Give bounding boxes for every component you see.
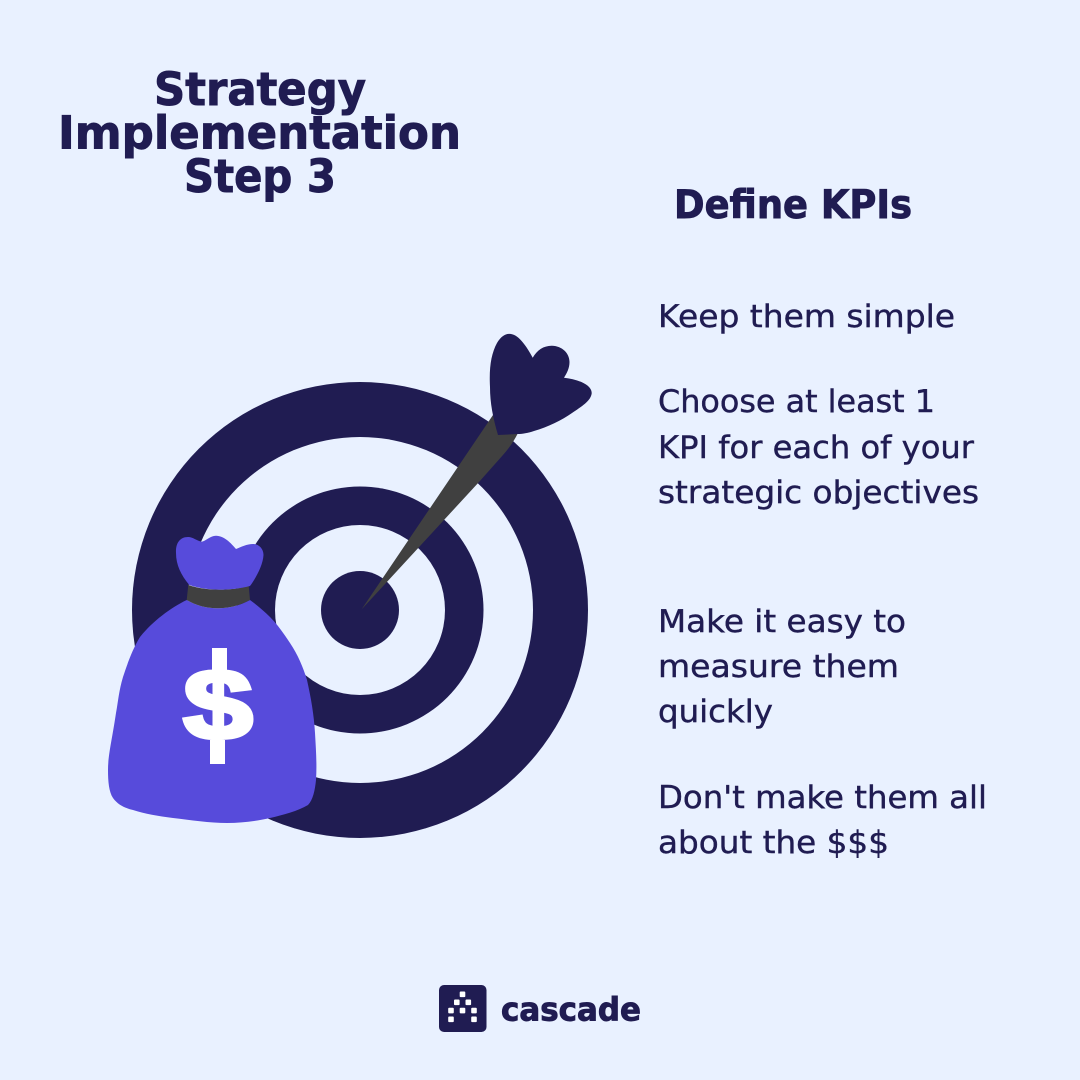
icon: money bag (108, 536, 316, 823)
target rings (132, 382, 588, 838)
tip: easy to measure: Make it easy to (658, 604, 906, 640)
title: Step 3 (184, 150, 336, 203)
tip: at least one KPI per objective (658, 384, 979, 511)
tip: not all about money: Don't make them all (658, 780, 987, 816)
dart fletching (490, 334, 592, 435)
title (58, 63, 461, 203)
title: Strategy (154, 63, 366, 116)
tip: keep simple: Keep them simple (658, 299, 955, 335)
tip: not all about money: about the $$$ (658, 825, 889, 861)
logo wordmark: cascade (501, 990, 641, 1028)
icon: target with dart (132, 334, 592, 838)
tip: at least one KPI per objective: Choose at least 1 (658, 384, 935, 420)
tip: easy to measure: measure them (658, 649, 899, 685)
tip: easy to measure (658, 604, 906, 730)
dart shaft (362, 415, 518, 610)
bag neck (176, 536, 264, 590)
tip: at least one KPI per objective: KPI for each of your (658, 430, 974, 466)
tip: easy to measure: quickly (658, 694, 773, 730)
tip: not all about money (658, 780, 987, 861)
bag band (187, 585, 250, 608)
dollar sign: $ (183, 649, 253, 760)
logo: cascade (439, 985, 641, 1032)
tip: at least one KPI per objective: strategic objectives (658, 475, 979, 511)
logo mark (439, 985, 486, 1032)
bag body (108, 600, 316, 823)
heading: Define KPIs: Define KPIs (674, 183, 912, 228)
title: Implementation (58, 106, 461, 160)
text block: KPI tips (658, 299, 987, 861)
